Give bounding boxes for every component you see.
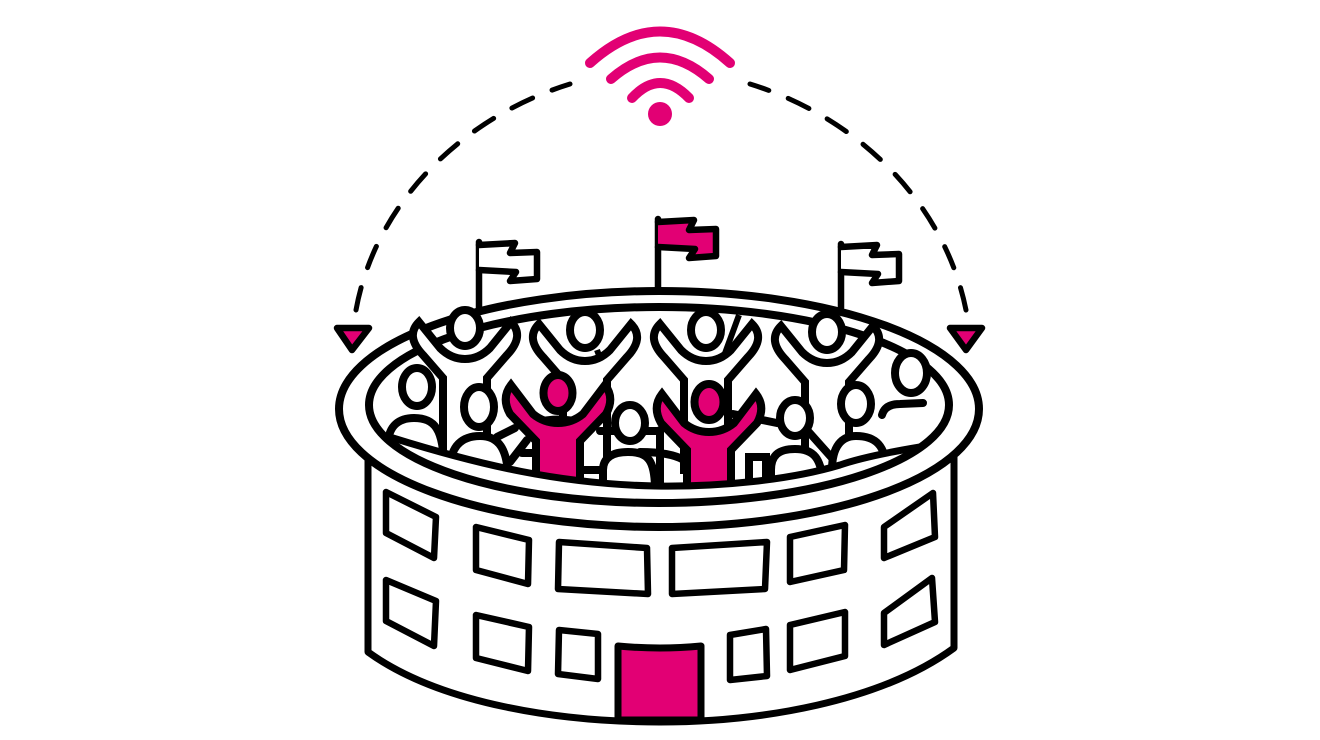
windows — [386, 492, 935, 680]
pink fan left — [506, 375, 610, 493]
door — [618, 646, 701, 720]
icon: left flag — [479, 242, 537, 312]
icon: wifi signal — [590, 32, 730, 126]
stadium body — [368, 455, 954, 722]
middle row fans — [388, 353, 927, 480]
crowd — [388, 310, 927, 502]
pink fan right — [657, 384, 761, 502]
icon: right flag — [841, 244, 899, 308]
arrow: dashed signal arc right — [750, 84, 982, 350]
stadium rim — [339, 291, 979, 527]
rim inner ledge — [393, 438, 920, 486]
back row fans — [413, 310, 879, 472]
arrow: dashed signal arc left — [337, 84, 570, 350]
front row fans — [600, 400, 832, 490]
icon: centre flag — [658, 219, 716, 291]
illustration: connected stadium — [334, 26, 986, 726]
